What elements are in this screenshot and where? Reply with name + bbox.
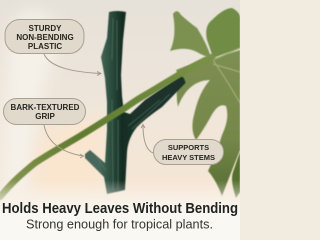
subheading: Strong enough for tropical plants.: [26, 216, 213, 232]
callout: supports heavy stems: HEAVY STEMS: [162, 153, 215, 162]
arrow: to stake: [44, 54, 101, 76]
arrow: to branch: [141, 124, 153, 153]
callout: sturdy non-bending plastic: STURDY: [29, 24, 62, 33]
arrow: to grip: [44, 125, 84, 158]
callout: bark-textured grip: BARK-TEXTURED: [11, 103, 80, 112]
callout: supports heavy stems: [154, 140, 224, 164]
background: [0, 0, 240, 240]
plant stem: [0, 57, 212, 197]
callout: sturdy non-bending plastic: NON-BENDING: [16, 33, 74, 42]
bottom white fade: [0, 180, 240, 240]
callout: sturdy non-bending plastic: PLASTIC: [28, 42, 62, 51]
bark-textured stake: [85, 11, 186, 194]
callout: supports heavy stems: SUPPORTS: [168, 143, 209, 152]
callout: bark-textured grip: GRIP: [35, 112, 55, 121]
monstera leaf: [170, 8, 240, 198]
callout: sturdy non-bending plastic: [5, 20, 84, 54]
callout: bark-textured grip: [4, 98, 86, 124]
